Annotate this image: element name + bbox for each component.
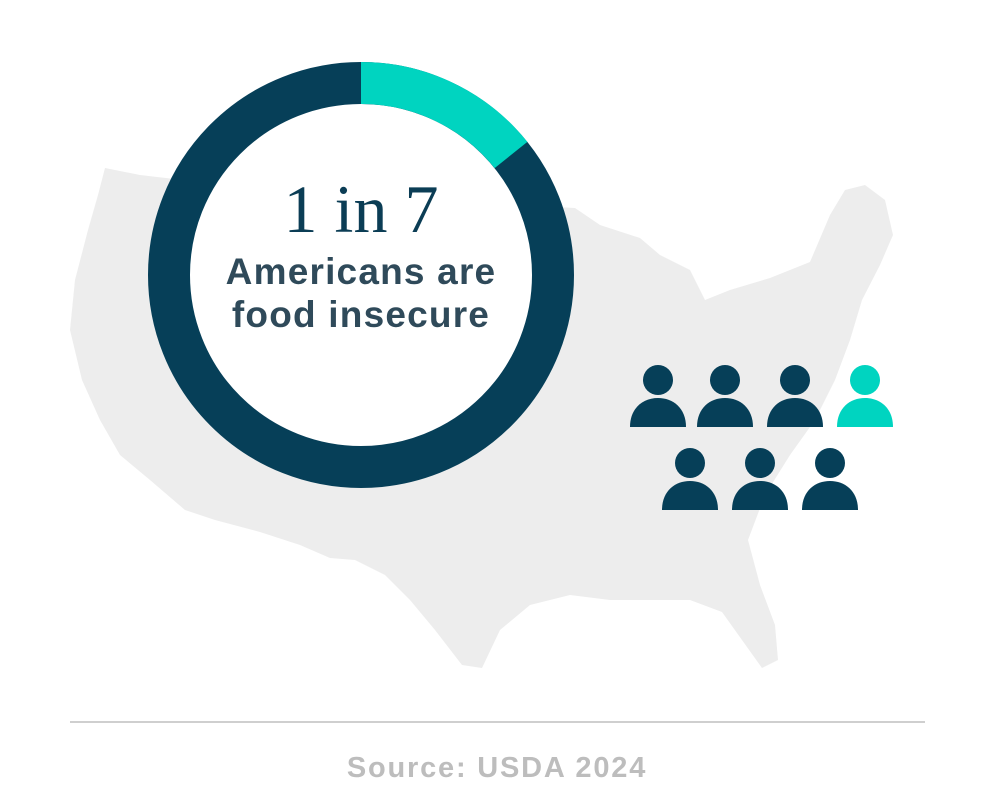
- subheading: Americans are food insecure: food insecure: [232, 294, 490, 335]
- donut chart: 1 in 7: [169, 83, 553, 467]
- subheading: Americans are food insecure: Americans are: [226, 251, 496, 292]
- map: US background: [70, 168, 893, 668]
- source note: Source: USDA 2024: [347, 752, 647, 784]
- headline: 1 in 7: 1 in 7: [284, 171, 438, 247]
- icon group: people (1 of 7 highlighted): [630, 365, 893, 510]
- subheading: Americans are food insecure: [226, 251, 496, 335]
